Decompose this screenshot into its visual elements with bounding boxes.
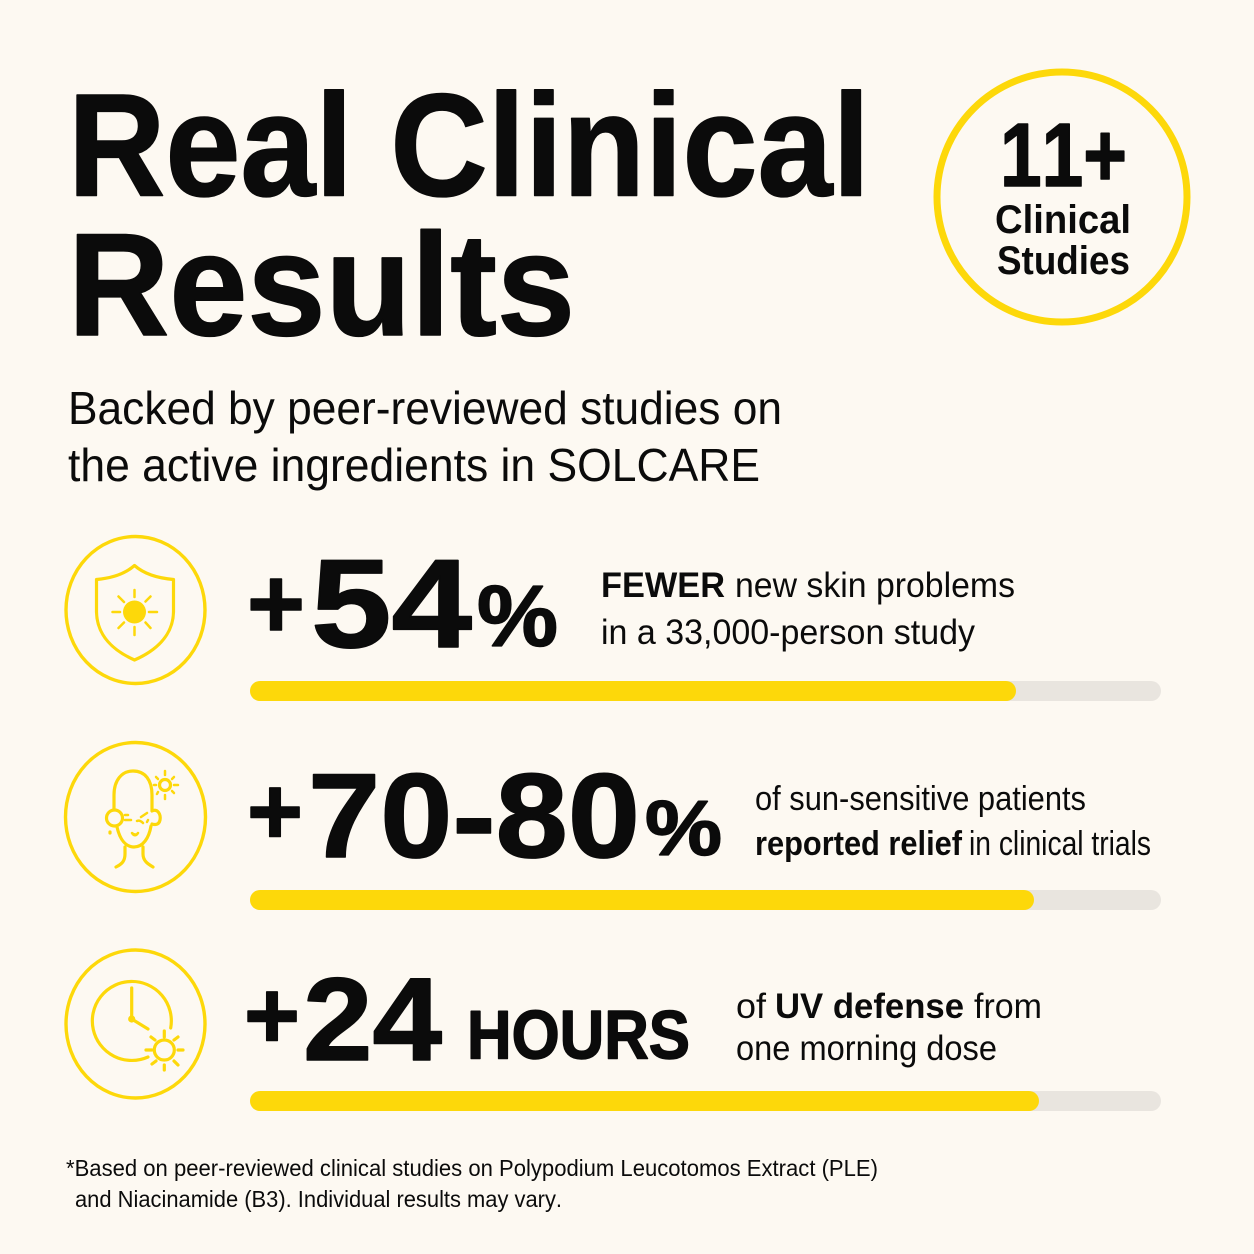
description: UV defense [736, 987, 1042, 1068]
description: sun-sensitive patients: reported relief [755, 825, 963, 863]
description: fewer new skin problems: in a 33,000-person study [601, 613, 975, 652]
stat: +54% [247, 533, 558, 674]
stat: +70-80% [247, 749, 722, 883]
icon: face with sun [66, 742, 206, 892]
progress bar 1 [250, 681, 1161, 701]
footnote: and Niacinamide (B3). Individual results may vary. [75, 1186, 562, 1212]
stat: +24 hours [244, 954, 690, 1086]
badge: 11+ clinical studies: 11+ [1000, 106, 1127, 206]
title: Real Clinical [68, 64, 870, 226]
progress bar 2 [250, 890, 1161, 910]
stat: +54%: % [477, 569, 558, 665]
stat: +70-80%: % [645, 784, 722, 872]
subtitle: the active ingredients in SOLCARE [68, 439, 760, 491]
footnote [66, 1155, 878, 1212]
badge: 11+ clinical studies: Studies [997, 239, 1130, 283]
description: UV defense: of [736, 987, 766, 1026]
stat: +54%: 54 [311, 533, 472, 674]
stat: +54%: + [247, 548, 305, 660]
title [68, 64, 870, 366]
badge: 11+ clinical studies [937, 72, 1187, 322]
description: sun-sensitive patients [755, 780, 1151, 863]
stat: +24 hours: HOURS [467, 996, 690, 1074]
subtitle [68, 382, 782, 491]
stat: +24 hours: 24 [303, 954, 442, 1086]
description: UV defense: UV defense [775, 987, 964, 1026]
footnote: *Based on peer-reviewed clinical studies on Polypodium Leucotomos Extract (PLE) [66, 1155, 878, 1181]
stat: +70-80%: + [247, 758, 303, 865]
subtitle: Backed by peer-reviewed studies on [68, 382, 782, 434]
description: UV defense: one morning dose [736, 1029, 997, 1068]
description: sun-sensitive patients: of sun-sensitive patients [755, 780, 1086, 818]
description: fewer new skin problems: FEWER [601, 566, 725, 605]
progress bar 3 [250, 1091, 1161, 1111]
badge: 11+ clinical studies: Clinical [995, 198, 1131, 242]
description: fewer new skin problems: new skin problems [735, 566, 1015, 605]
description: UV defense: from [974, 987, 1042, 1026]
stat: +24 hours: + [244, 962, 300, 1069]
stat: +70-80%: 70-80 [308, 749, 640, 883]
icon: clock with sun [66, 950, 205, 1098]
title: Results [68, 203, 575, 366]
description: fewer new skin problems [601, 566, 1015, 652]
icon: shield with sun [66, 536, 205, 684]
description: sun-sensitive patients: in clinical trials [969, 825, 1151, 863]
